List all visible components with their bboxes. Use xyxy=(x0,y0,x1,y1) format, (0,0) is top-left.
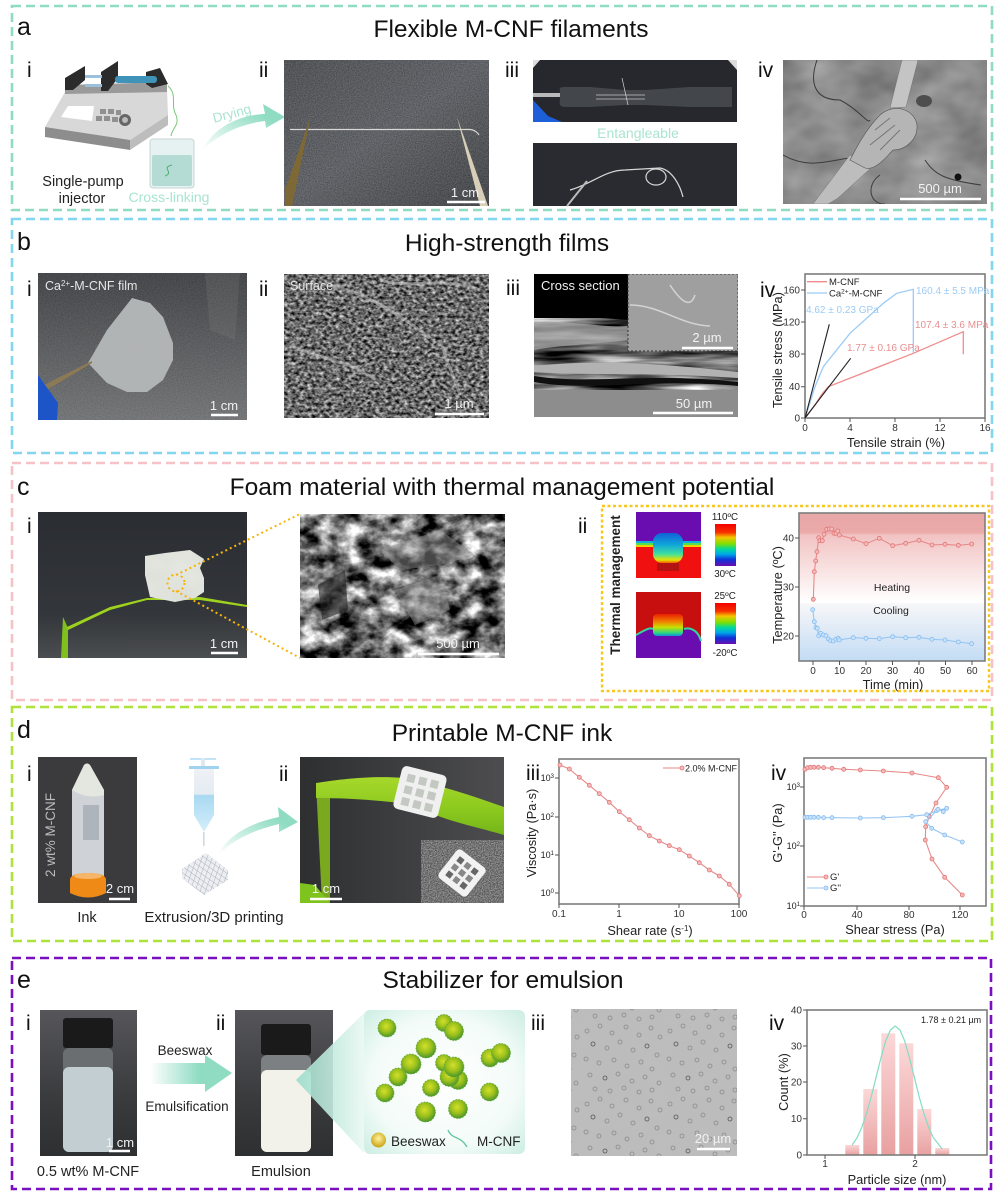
label d-iv: iv xyxy=(771,762,787,785)
chart: viscosity vs shear rate: -1 xyxy=(681,924,689,933)
chart: G' and G'' vs shear stress: 3 xyxy=(797,783,801,789)
film label: -M-CNF film xyxy=(70,279,137,293)
legend M-CNF: M-CNF xyxy=(477,1134,520,1149)
chart: viscosity vs shear rate: 1 xyxy=(551,851,555,857)
panel letter e: e xyxy=(17,966,31,994)
photo: entangled filament xyxy=(533,143,737,206)
photo: Ca2+-M-CNF film xyxy=(38,273,247,420)
chart: temperature vs time: 20 xyxy=(783,632,794,642)
scale bar 50 µm: 50 µm xyxy=(676,396,712,411)
panel d: printable M-CNF ink xyxy=(12,707,992,941)
chart: G' and G'' vs shear stress: Shear stress (Pa) xyxy=(845,922,945,937)
chart: tensile stress vs strain: 4 xyxy=(847,423,853,434)
label entangleable: Entangleable xyxy=(597,125,679,141)
chart: particle size histogram: Particle size (nm) xyxy=(848,1172,946,1187)
chart: viscosity vs shear rate: Viscosity (Pa·s) xyxy=(524,789,539,877)
chart: tensile stress vs strain: 80 xyxy=(789,350,800,360)
chart: temperature vs time xyxy=(770,513,985,692)
chart: viscosity vs shear rate: 2 xyxy=(551,813,555,819)
SEM image: surface xyxy=(284,274,489,418)
film label: Ca xyxy=(45,279,61,293)
chart: G' and G'' vs shear stress xyxy=(770,758,986,937)
chart: viscosity vs shear rate: ) xyxy=(688,923,693,938)
scale bar 1 µm xyxy=(435,396,484,414)
chart: viscosity vs shear rate: 0 xyxy=(551,889,555,895)
zoom callout lines xyxy=(168,514,300,658)
colour bar cooling: 25ºC xyxy=(714,591,736,602)
chart: tensile stress vs strain: Ca xyxy=(829,288,841,300)
chart: particle size histogram: 20 xyxy=(791,1078,802,1088)
chart: G' and G'' vs shear stress: 0 xyxy=(801,910,807,921)
SEM image: foam xyxy=(300,514,505,658)
surface label: Surface xyxy=(290,279,333,293)
chart: temperature vs time: 30 xyxy=(783,582,794,594)
chart: viscosity vs shear rate: 10 xyxy=(541,850,551,860)
chart: tensile stress vs strain: -M-CNF xyxy=(849,288,883,300)
thermal management label: Thermal management xyxy=(608,515,623,655)
chart: particle size histogram: 10 xyxy=(791,1114,802,1125)
chart: tensile stress vs strain: Tensile strain (%) xyxy=(847,435,945,450)
chart: G' and G'' vs shear stress: 2 xyxy=(797,842,801,848)
panel a: flexible M-CNF filaments xyxy=(12,6,992,210)
chart: temperature vs time: 40 xyxy=(913,666,925,677)
chart: particle size histogram: 40 xyxy=(791,1006,802,1016)
title e: Stabilizer for emulsion xyxy=(382,967,624,994)
scale bar 1 cm: 1 cm xyxy=(312,881,340,896)
caption M-CNF: 0.5 wt% M-CNF xyxy=(37,1164,139,1180)
inset lattice photo xyxy=(421,840,504,903)
scale bar 1 cm: 1 cm xyxy=(451,185,479,200)
ink concentration label: 2 wt% M-CNF xyxy=(43,793,58,877)
legend M-CNF xyxy=(448,1130,520,1149)
chart: tensile stress vs strain: 120 xyxy=(783,318,800,328)
label b-iv: iv xyxy=(760,279,776,302)
photo: filament wound on handle xyxy=(533,60,737,122)
panel letter d: d xyxy=(17,716,31,744)
label e-iii: iii xyxy=(531,1012,545,1035)
chart: tensile stress vs strain: 2+ xyxy=(841,288,849,296)
scale bar 20 µm: 20 µm xyxy=(695,1131,731,1146)
chart: tensile stress vs strain: 0 xyxy=(794,414,800,424)
chart: tensile stress vs strain: 107.4 ± 3.6 MPa xyxy=(915,320,989,331)
label c-ii: ii xyxy=(578,515,587,538)
label beeswax: Beeswax xyxy=(158,1043,213,1058)
label single-pump injector: injector xyxy=(59,191,106,207)
chart: tensile stress vs strain: 16 xyxy=(979,423,991,434)
chart: G' and G'' vs shear stress: 120 xyxy=(952,910,969,921)
chart: G' and G'' vs shear stress: G' xyxy=(830,872,839,883)
panel letter a: a xyxy=(17,13,31,41)
label b-ii: ii xyxy=(259,278,268,301)
chart: viscosity vs shear rate: 10 xyxy=(541,812,551,822)
zoom wedge xyxy=(296,1013,364,1153)
chart: viscosity vs shear rate: 100 xyxy=(731,909,748,920)
label a-ii: ii xyxy=(259,59,268,82)
chart: tensile stress vs strain: 1.77 ± 0.16 GPa xyxy=(847,343,920,354)
colour bar heating: 110ºC xyxy=(712,512,738,523)
photo: foam on leaf xyxy=(38,512,247,658)
chart: tensile stress vs strain: Tensile stress (MPa) xyxy=(770,292,785,408)
chart: tensile stress vs strain xyxy=(770,274,991,450)
chart: viscosity vs shear rate: 2.0% M-CNF xyxy=(685,764,738,774)
arrow: drying xyxy=(202,104,285,150)
panel c: foam material xyxy=(12,463,992,700)
chart: tensile stress vs strain: 12 xyxy=(934,423,946,434)
title b: High-strength films xyxy=(405,230,609,257)
chart: temperature vs time: 20 xyxy=(860,666,872,677)
chart: temperature vs time: 60 xyxy=(966,666,978,677)
white lattice xyxy=(392,765,448,819)
scale bar 1 cm: 1 cm xyxy=(210,636,238,651)
chart: viscosity vs shear rate: 10 xyxy=(673,909,685,920)
photo: ink tube xyxy=(38,757,137,903)
icon: printed lattice xyxy=(182,853,228,895)
chart: tensile stress vs strain: 160.4 ± 5.5 MPa xyxy=(916,286,990,297)
SEM image: cross section xyxy=(534,274,738,417)
photo: printed lattice on leaf xyxy=(300,757,504,903)
photo: emulsion vial xyxy=(235,1010,333,1156)
title a: Flexible M-CNF filaments xyxy=(374,16,648,43)
scale bar 1 cm: 1 cm xyxy=(210,398,238,413)
label d-ii: ii xyxy=(279,763,288,786)
label a-iii: iii xyxy=(505,59,519,82)
chart: particle size histogram: 1.78 ± 0.21 µm xyxy=(921,1015,981,1025)
chart: tensile stress vs strain: 4.62 ± 0.23 GPa xyxy=(806,305,879,316)
label d-i: i xyxy=(27,763,32,786)
title c: Foam material with thermal management potential xyxy=(230,474,774,501)
chart: tensile stress vs strain: 40 xyxy=(789,382,800,393)
arrow: beeswax emulsification xyxy=(150,1055,232,1092)
caption emulsion: Emulsion xyxy=(251,1164,311,1180)
label b-iii: iii xyxy=(506,277,520,300)
chart: particle size histogram: 0 xyxy=(796,1150,802,1162)
label single-pump injector: Single-pump xyxy=(42,174,124,190)
scale bar 50 µm xyxy=(653,396,733,413)
scale bar 500 µm xyxy=(418,636,499,654)
colour bar heating xyxy=(712,512,738,580)
chart: viscosity vs shear rate: Shear rate (s xyxy=(607,923,681,938)
chart: temperature vs time: Heating xyxy=(874,582,910,594)
chart: viscosity vs shear rate: 10 xyxy=(541,773,551,783)
icon: syringe extrusion xyxy=(189,758,219,846)
thermal image heating xyxy=(636,512,701,578)
label b-i: i xyxy=(27,278,32,301)
label e-ii: ii xyxy=(216,1012,225,1035)
panel: emulsion droplets xyxy=(364,1010,525,1154)
chart: tensile stress vs strain: 0 xyxy=(802,423,808,434)
chart: particle size histogram: Count (%) xyxy=(776,1053,791,1111)
photo: filament held by tweezers xyxy=(284,60,489,206)
chart: viscosity vs shear rate: 3 xyxy=(551,774,555,780)
label cross-linking: Cross-linking xyxy=(129,189,209,205)
chart: viscosity vs shear rate: 0.1 xyxy=(552,909,566,920)
title d: Printable M-CNF ink xyxy=(392,720,613,747)
droplets xyxy=(376,1014,510,1122)
chart: G' and G'' vs shear stress: 80 xyxy=(903,910,915,921)
chart: temperature vs time: 0 xyxy=(810,666,816,677)
scale bar 2 µm: 2 µm xyxy=(692,330,722,345)
chart: temperature vs time: 50 xyxy=(940,666,951,677)
chart: G' and G'' vs shear stress: 10 xyxy=(787,782,797,792)
film label: 2+ xyxy=(61,279,70,288)
panel b: high-strength films xyxy=(12,219,992,453)
scale bar 500 µm xyxy=(900,181,981,199)
scale bar 1 cm: 1 cm xyxy=(106,1135,134,1150)
chart: temperature vs time: 10 xyxy=(834,666,845,677)
inset image xyxy=(628,274,738,351)
label d-iii: iii xyxy=(526,762,540,785)
chart: tensile stress vs strain: 160 xyxy=(783,286,800,296)
colour bar cooling: -20ºC xyxy=(713,648,737,659)
label c-i: i xyxy=(27,515,32,538)
chart: viscosity vs shear rate: 10 xyxy=(541,888,551,898)
SEM image: knot xyxy=(783,60,987,204)
chart: G' and G'' vs shear stress: 10 xyxy=(787,841,797,851)
micrograph: emulsion droplets xyxy=(571,1009,737,1156)
panel letter b: b xyxy=(17,228,31,256)
chart: G' and G'' vs shear stress: G'' xyxy=(830,883,841,894)
scale bar 500 µm: 500 µm xyxy=(918,181,962,196)
thermal management box xyxy=(602,506,989,692)
panel letter c: c xyxy=(17,473,30,501)
label drying: Drying xyxy=(211,101,253,126)
chart: temperature vs time: 30 xyxy=(887,666,898,677)
label a-iv: iv xyxy=(758,59,774,82)
legend beeswax xyxy=(371,1132,446,1149)
chart: temperature vs time: Cooling xyxy=(873,605,909,617)
chart: tensile stress vs strain: 8 xyxy=(892,423,898,434)
chart: particle size histogram: 2 xyxy=(912,1159,918,1170)
cross section label: Cross section xyxy=(541,278,620,293)
label single-pump injector xyxy=(42,174,124,207)
chart: G' and G'' vs shear stress: 40 xyxy=(851,910,863,921)
label e-iv: iv xyxy=(769,1012,785,1035)
colour bar heating: 30ºC xyxy=(714,569,736,580)
label a-i: i xyxy=(27,59,32,82)
chart: G' and G'' vs shear stress: 10 xyxy=(787,901,797,911)
colour bar cooling xyxy=(713,591,737,659)
chart: G' and G'' vs shear stress: 1 xyxy=(797,902,801,908)
scale bar 2 cm: 2 cm xyxy=(106,881,134,896)
chart: G' and G'' vs shear stress: G'-G'' (Pa) xyxy=(770,803,785,863)
icon: single-pump injector xyxy=(45,61,194,188)
chart: viscosity vs shear rate xyxy=(524,759,748,938)
thermal image cooling xyxy=(636,592,701,658)
chart: temperature vs time: Temperature (ºC) xyxy=(770,546,785,644)
caption extrusion: Extrusion/3D printing xyxy=(144,909,284,926)
scale bar 1 µm: 1 µm xyxy=(444,396,474,411)
chart: temperature vs time: Time (min) xyxy=(863,677,923,692)
arrow: extrusion to print xyxy=(218,807,298,855)
photo: M-CNF vial xyxy=(40,1010,137,1156)
chart: particle size histogram: 1 xyxy=(822,1159,828,1170)
chart: temperature vs time: 40 xyxy=(783,534,794,544)
chart: viscosity vs shear rate: 1 xyxy=(616,909,622,920)
chart: tensile stress vs strain: M-CNF xyxy=(829,277,860,288)
chart: particle size histogram: 30 xyxy=(791,1042,802,1052)
chart: particle size histogram xyxy=(776,1006,987,1187)
label e-i: i xyxy=(26,1012,31,1035)
label emulsification: Emulsification xyxy=(145,1099,229,1114)
scale bar 500 µm: 500 µm xyxy=(436,636,480,651)
scale bar 2 µm xyxy=(682,330,733,348)
scale bar 1 cm xyxy=(447,185,485,202)
legend beeswax: Beeswax xyxy=(391,1134,446,1149)
panel e: stabilizer for emulsion xyxy=(12,958,991,1189)
caption ink: Ink xyxy=(77,910,97,926)
